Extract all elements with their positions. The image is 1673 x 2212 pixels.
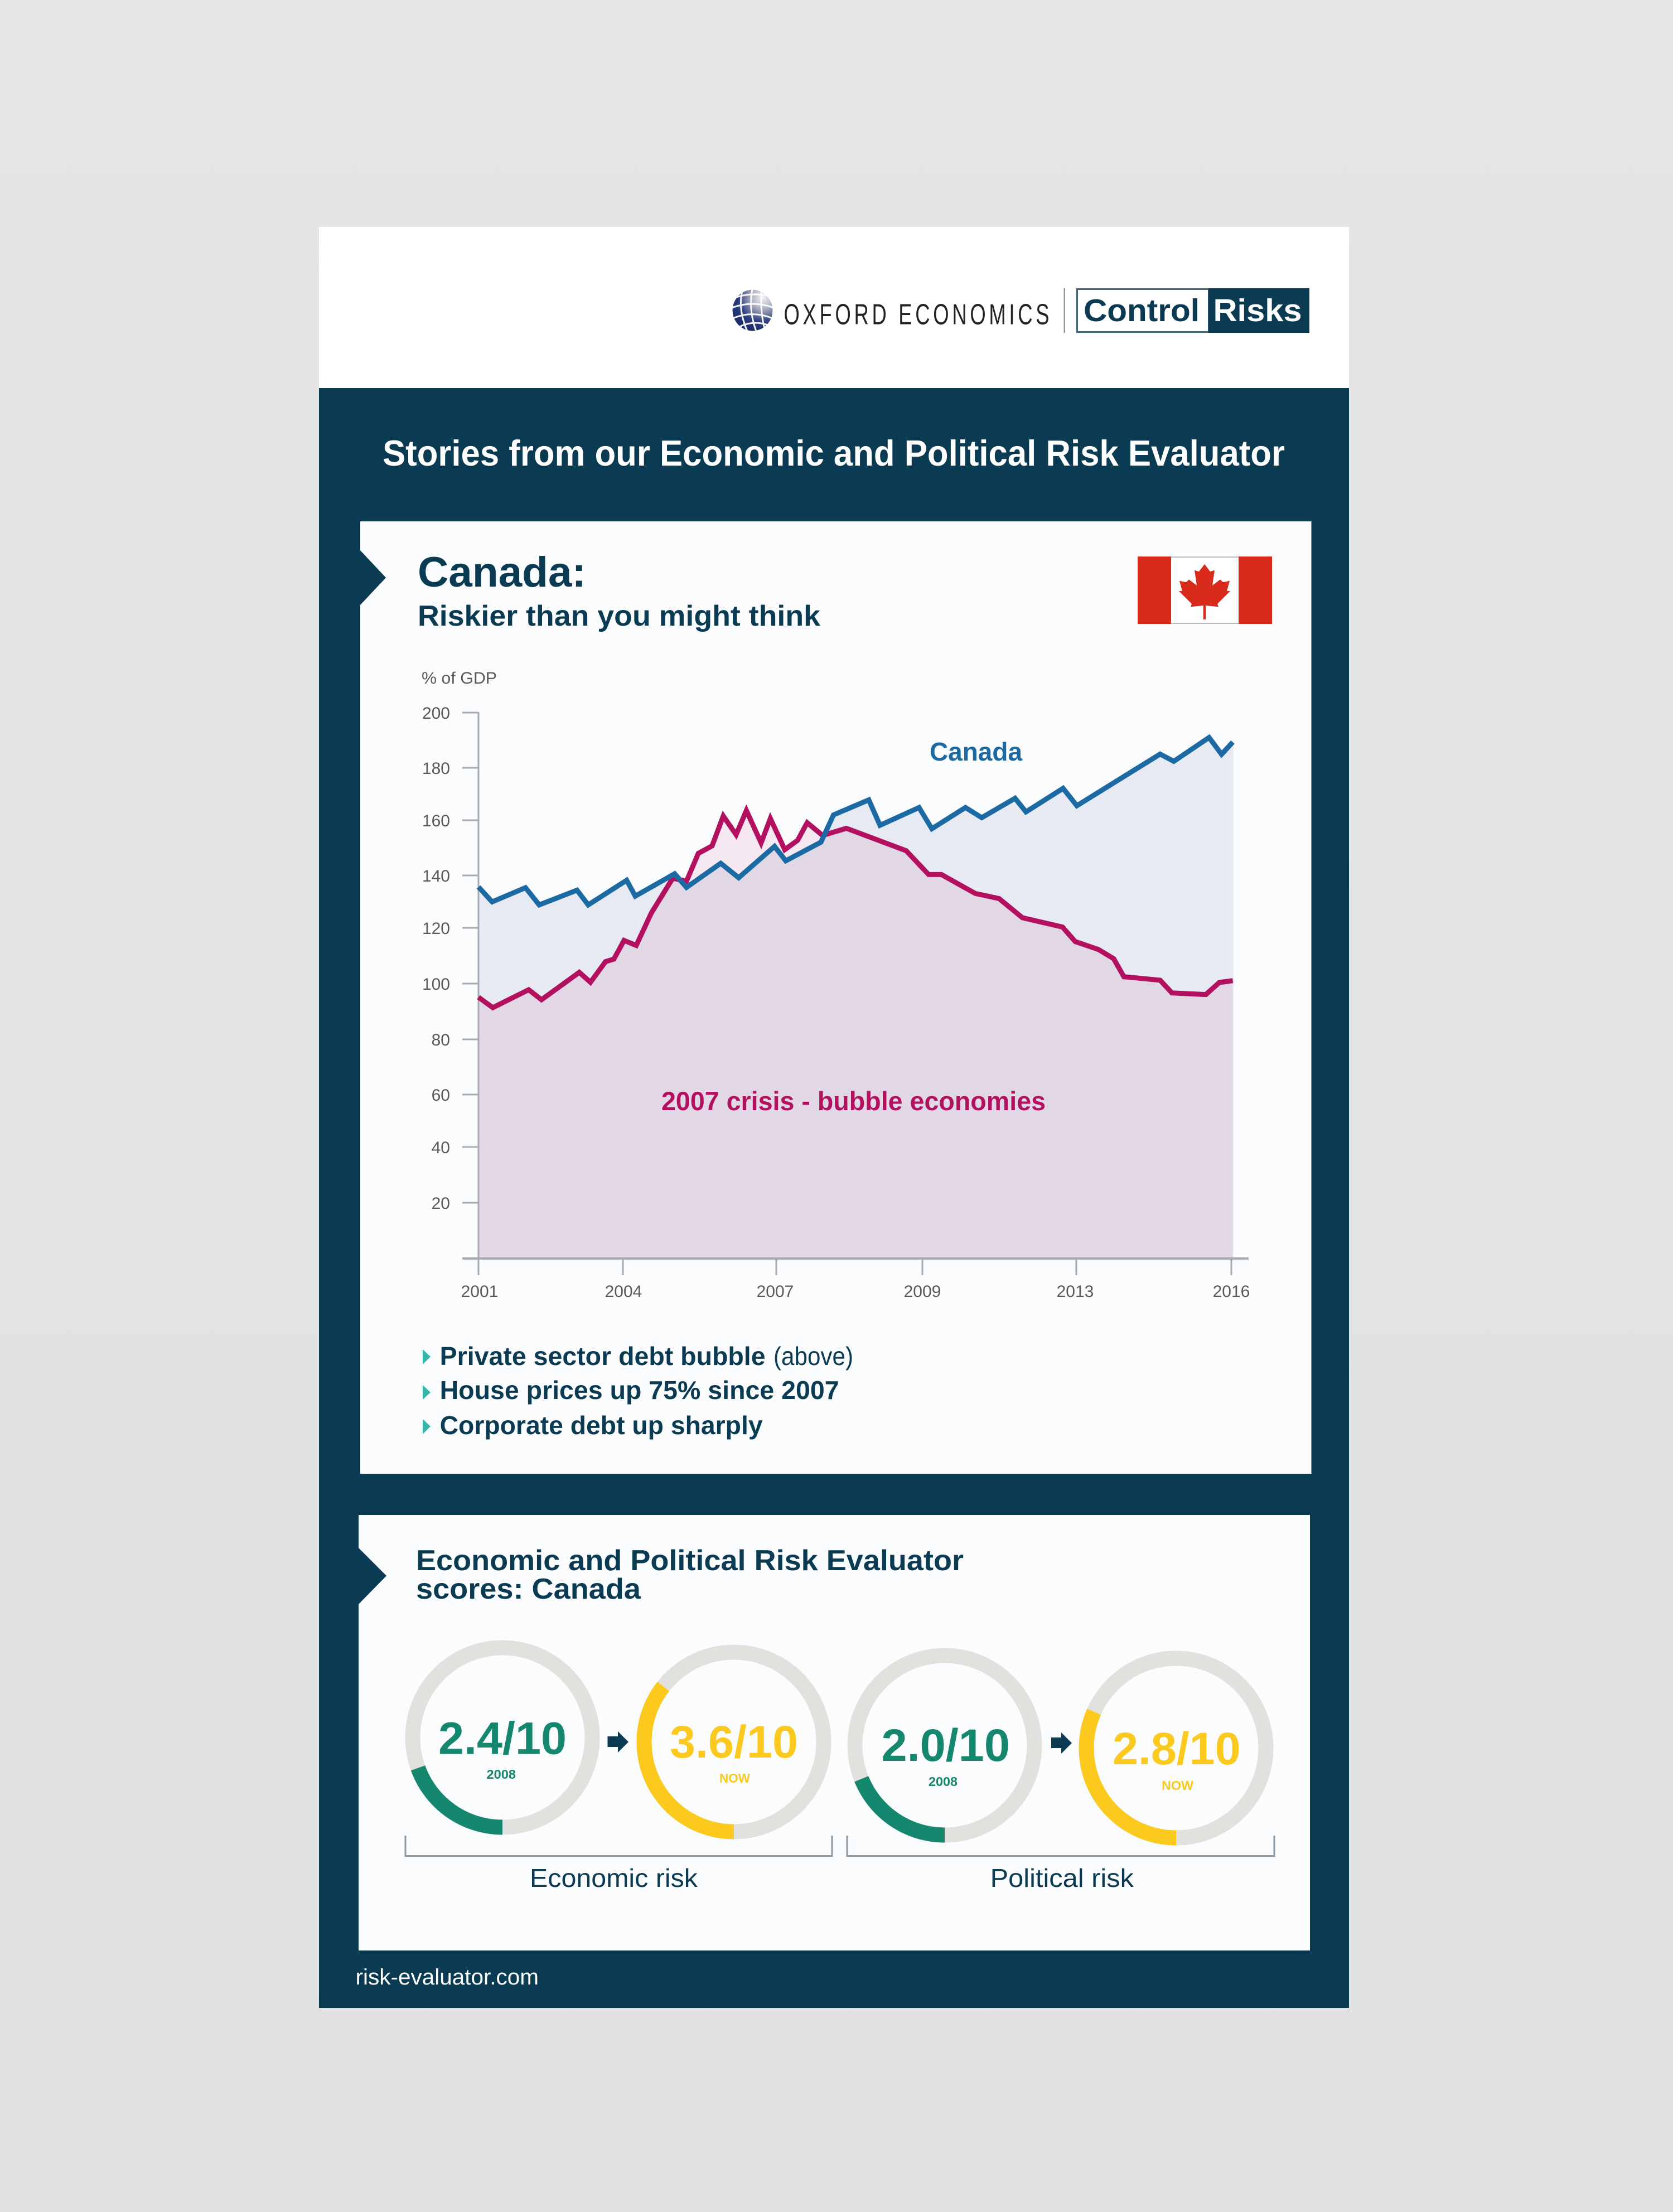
y axis labels: 20: [432, 1194, 450, 1213]
heading: risk evaluator scores: Economic and Political Risk Evaluator: [416, 1545, 964, 1577]
ring: political risk now: NOW: [1162, 1778, 1193, 1793]
infographic: [319, 227, 1349, 2008]
logo: Control Risks: Risks: [1213, 293, 1302, 328]
y axis labels: 120: [422, 919, 450, 938]
label: Political risk: Political risk: [990, 1863, 1134, 1892]
notch marker: [360, 550, 386, 605]
axis unit label: % of GDP: [422, 669, 497, 688]
header panel with logos: [319, 227, 1349, 388]
bullet list: House prices up 75% since 2007: [440, 1376, 839, 1405]
x axis labels: 2004: [605, 1282, 642, 1301]
heading: risk evaluator scores: [416, 1545, 964, 1605]
x axis labels: 2009: [904, 1282, 941, 1301]
ring: political risk now: 2.8/10: [1113, 1724, 1240, 1774]
arrow: economic risk change: [608, 1731, 628, 1753]
y axis labels: 40: [432, 1139, 450, 1157]
bracket: political risk: [847, 1836, 1274, 1856]
y axis labels: 180: [422, 759, 450, 778]
dark main panel: [319, 388, 1349, 2008]
heading: Canada: Canada:: [418, 549, 586, 596]
series label: Canada: Canada: [930, 737, 1022, 766]
line chart: [422, 704, 1250, 1301]
bullet list: [423, 1342, 853, 1440]
y axis labels: 200: [422, 704, 450, 723]
ring: economic risk now: 3.6/10: [670, 1717, 798, 1768]
logo: Control Risks: [1077, 288, 1309, 333]
x axis labels: 2007: [757, 1282, 794, 1301]
ring: economic risk now: [644, 1652, 824, 1832]
panel: Canada chart card: [360, 521, 1312, 1474]
area: Canada: [478, 738, 1234, 1259]
notch marker: [359, 1548, 386, 1604]
label: Economic risk: Economic risk: [530, 1863, 698, 1892]
line: Canada: [478, 738, 1233, 905]
subheading: Riskier than you might think: [418, 600, 820, 632]
bracket: economic risk: [405, 1836, 832, 1856]
ring: economic risk 2008: 2.4/10: [438, 1713, 567, 1764]
x axis labels: 2013: [1057, 1282, 1094, 1301]
series label: 2007 crisis: 2007 crisis - bubble economies: [661, 1086, 1046, 1116]
y axis labels: [422, 704, 450, 1213]
ring: political risk now: [1086, 1658, 1266, 1838]
heading: risk evaluator scores: scores: Canada: [416, 1573, 641, 1605]
ring: economic risk 2008: 2008: [486, 1767, 516, 1782]
y axis labels: 160: [422, 812, 450, 830]
panel: risk scores card: [359, 1515, 1310, 1950]
ring: economic risk 2008: [413, 1648, 592, 1827]
logo: Control Risks: Control: [1084, 293, 1200, 328]
arrow: political risk change: [1051, 1732, 1072, 1754]
footer url: risk-evaluator.com: [356, 1965, 539, 1990]
area: 2007 crisis bubble economies: [478, 811, 1232, 1259]
x axis labels: 2001: [461, 1282, 498, 1301]
main title: Stories from our Economic and Political Risk Evaluator: [383, 433, 1285, 473]
ring: political risk 2008: 2.0/10: [881, 1720, 1010, 1771]
axes and tick marks: [462, 712, 1249, 1275]
icon: Canadian flag: [1138, 556, 1272, 624]
bullet list: Private sector debt bubble: [440, 1342, 766, 1371]
x axis labels: [461, 1282, 1250, 1301]
line: 2007 crisis bubble economies: [478, 811, 1233, 1008]
ring: political risk 2008: 2008: [929, 1774, 958, 1789]
bullet list: (above): [773, 1342, 853, 1371]
y axis labels: 80: [432, 1031, 450, 1049]
ring: economic risk now: NOW: [719, 1771, 750, 1785]
logo: Oxford Economics wordmark: OXFORD ECONOMICS: [784, 298, 1049, 331]
y axis labels: 100: [422, 975, 450, 994]
x axis labels: 2016: [1213, 1282, 1250, 1301]
y axis labels: 140: [422, 867, 450, 885]
logo: Oxford Economics globe: [732, 289, 774, 331]
bullet list: Corporate debt up sharply: [440, 1411, 763, 1440]
y axis labels: 60: [432, 1086, 450, 1105]
ring: political risk 2008: [855, 1656, 1034, 1835]
